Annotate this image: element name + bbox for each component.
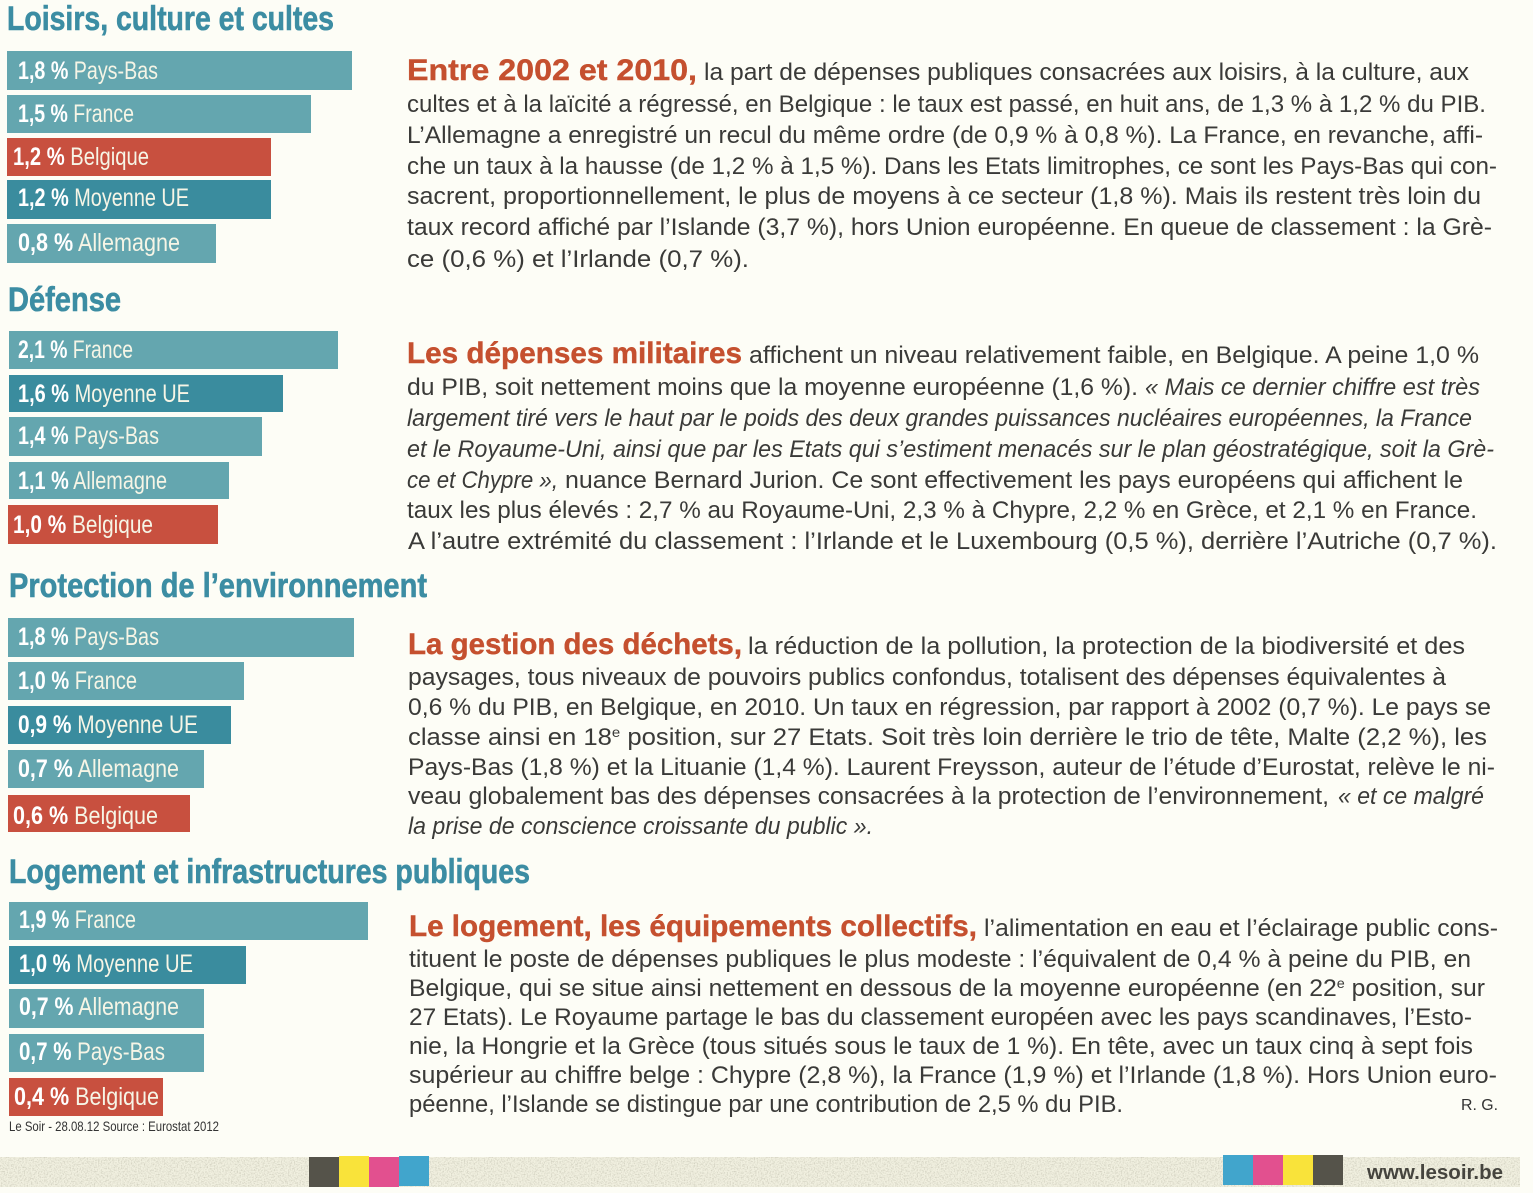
bar: Moyenne UE 0,9 % bbox=[8, 706, 231, 744]
text block: loisirs: taux record affiché par l’Islande (3,7 %), hors Union européenne. En queue de classement : la Grè- bbox=[407, 214, 1492, 241]
source credit: Le Soir - 28.08.12 Source : Eurostat 2012 bbox=[9, 1118, 219, 1134]
text block: défense: « Mais ce dernier chiffre est très bbox=[1145, 374, 1480, 401]
bar: Allemagne 0,7 %: 0,7 % Allemagne bbox=[18, 755, 179, 783]
bar: France 1,0 %: 1,0 % France bbox=[18, 667, 137, 695]
panel: protection de l'environnement chart bbox=[8, 567, 427, 832]
text block: défense: ce et Chypre », bbox=[407, 467, 558, 494]
bar: Allemagne 0,7 % bbox=[8, 750, 204, 788]
text block: environnement: paysages, tous niveaux de pouvoirs publics confondus, totalisent des dépenses équivalentes à bbox=[408, 664, 1447, 691]
bar: Pays-Bas 1,8 % bbox=[8, 618, 354, 657]
bar: Belgique 0,6 %: 0,6 % Belgique bbox=[13, 802, 158, 830]
text block: logement: péenne, l’Islande se distingue par une contribution de 2,5 % du PIB. bbox=[409, 1091, 1123, 1118]
text block: logement: nie, la Hongrie et la Grèce (tous situés sous le taux de 1 %). En tête, avec un taux cinq à sept fois bbox=[409, 1033, 1473, 1060]
bar: France 1,9 %: 1,9 % France bbox=[19, 906, 136, 934]
heading: défense: Défense bbox=[8, 281, 121, 319]
bar: Belgique 1,0 % bbox=[8, 505, 218, 544]
bar: Belgique 1,0 %: 1,0 % Belgique bbox=[13, 511, 153, 539]
lead-in: entre 2002 et 2010: Entre 2002 et 2010, bbox=[407, 54, 697, 87]
panel: défense chart bbox=[8, 281, 338, 544]
text block: logement: l’alimentation en eau et l’éclairage public cons- bbox=[984, 915, 1498, 942]
text block: défense: et le Royaume-Uni, ainsi que par les Etats qui s’estiment menacés sur le plan géostratégique, soit la Grè- bbox=[407, 436, 1494, 463]
bar: Allemagne 0,7 % bbox=[9, 989, 204, 1028]
text block: loisirs: cultes et à la laïcité a régressé, en Belgique : le taux est passé, en huit ans, de 1,3 % à 1,2 % du PIB. bbox=[407, 91, 1486, 118]
colour registration marks left bbox=[309, 1156, 429, 1187]
bar: Pays-Bas 0,7 % bbox=[9, 1034, 204, 1072]
footer strip bbox=[0, 1155, 1520, 1187]
bar: Moyenne UE 1,2 % bbox=[7, 180, 271, 219]
bar: Pays-Bas 1,4 %: 1,4 % Pays-Bas bbox=[18, 422, 159, 450]
text block: environnement: 0,6 % du PIB, en Belgique, en 2010. Un taux en régression, par rapport à 2002 (0,7 %). Le pays se bbox=[408, 694, 1491, 721]
text block: environnement: classe ainsi en 18 bbox=[408, 724, 599, 751]
panel: logement et infrastructures publiques chart bbox=[9, 853, 530, 1134]
bar: France 1,5 %: 1,5 % France bbox=[18, 100, 134, 128]
colour registration marks right bbox=[1223, 1155, 1343, 1185]
text block: défense: taux les plus élevés : 2,7 % au Royaume-Uni, 2,3 % à Chypre, 2,2 % en Grèce, et 2,1 % en France. bbox=[407, 497, 1477, 524]
author initials: R. G. bbox=[1461, 1097, 1498, 1114]
text block: logement: tituent le poste de dépenses publiques le plus modeste : l’équivalent de 0,4 % à peine du PIB, en bbox=[409, 946, 1471, 973]
bar: Belgique 0,6 % bbox=[8, 795, 190, 832]
bar: France 1,0 % bbox=[8, 662, 244, 700]
text block: logement: Belgique, qui se situe ainsi nettement en dessous de la moyenne européenne (en 22 bbox=[409, 975, 1310, 1002]
bar: France 1,9 % bbox=[9, 902, 368, 940]
bar: Allemagne 0,8 % bbox=[7, 224, 216, 263]
heading: environnement: Protection de l’environnement bbox=[9, 567, 427, 605]
text block: environnement: Pays-Bas (1,8 %) et la Lituanie (1,4 %). Laurent Freysson, auteur de l’étude d’Eurostat, relève le ni- bbox=[408, 754, 1495, 781]
bar: Moyenne UE 1,0 % bbox=[9, 946, 246, 984]
text block: défense: du PIB, soit nettement moins que la moyenne européenne (1,6 %). bbox=[407, 374, 1138, 401]
bar: Pays-Bas 0,7 %: 0,7 % Pays-Bas bbox=[19, 1038, 165, 1066]
text block: environnement: e bbox=[612, 724, 620, 740]
text block: loisirs: sacrent, proportionnellement, le plus de moyens à ce secteur (1,8 %). Mais ils restent très loin du bbox=[407, 183, 1481, 210]
bar: Allemagne 0,7 %: 0,7 % Allemagne bbox=[19, 993, 179, 1021]
bar: Pays-Bas 1,8 %: 1,8 % Pays-Bas bbox=[18, 57, 158, 85]
text block: défense: largement tiré vers le haut par le poids des deux grandes puissances nucléaires européennes, la France bbox=[407, 405, 1472, 432]
text block: environnement: « et ce malgré bbox=[1338, 783, 1484, 810]
text block: défense: A l’autre extrémité du classement : l’Irlande et le Luxembourg (0,5 %), derrière l’Autriche (0,7 %). bbox=[408, 528, 1497, 555]
lead-in: le logement, les équipements collectifs: Le logement, les équipements collectifs, bbox=[409, 910, 977, 943]
text block: défense: affichent un niveau relativement faible, en Belgique. A peine 1,0 % bbox=[749, 342, 1479, 369]
website address: www.lesoir.be bbox=[1366, 1162, 1503, 1184]
bar: Allemagne 1,1 % bbox=[9, 462, 229, 499]
bar: Allemagne 0,8 %: 0,8 % Allemagne bbox=[18, 229, 180, 257]
bar: Pays-Bas 1,8 % bbox=[7, 51, 352, 90]
bar: Moyenne UE 0,9 %: 0,9 % Moyenne UE bbox=[18, 711, 198, 739]
lead-in: les dépenses militaires: Les dépenses militaires bbox=[407, 337, 742, 370]
bar: Moyenne UE 1,0 %: 1,0 % Moyenne UE bbox=[19, 950, 193, 978]
text block: environnement: veau globalement bas des dépenses consacrées à la protection de l’environnement, bbox=[408, 783, 1329, 810]
bar: Pays-Bas 1,8 %: 1,8 % Pays-Bas bbox=[18, 623, 159, 651]
bar: Allemagne 1,1 %: 1,1 % Allemagne bbox=[18, 467, 167, 495]
text block: environnement bbox=[408, 628, 1495, 840]
heading: loisirs: Loisirs, culture et cultes bbox=[7, 0, 334, 38]
bar: Moyenne UE 1,2 %: 1,2 % Moyenne UE bbox=[18, 184, 189, 212]
bar: Moyenne UE 1,6 %: 1,6 % Moyenne UE bbox=[18, 380, 190, 408]
bar: France 2,1 %: 2,1 % France bbox=[18, 336, 133, 364]
bar: Belgique 0,4 % bbox=[9, 1078, 163, 1116]
lead-in: la gestion des déchets: La gestion des déchets, bbox=[408, 628, 742, 661]
text block: loisirs bbox=[407, 54, 1497, 273]
panel: loisirs, culture et cultes chart bbox=[7, 0, 352, 263]
bar: Belgique 0,4 %: 0,4 % Belgique bbox=[14, 1083, 159, 1111]
text block: environnement: la réduction de la pollution, la protection de la biodiversité et des bbox=[748, 633, 1465, 660]
heading: logement: Logement et infrastructures publiques bbox=[9, 853, 530, 891]
bar: Belgique 1,2 %: 1,2 % Belgique bbox=[13, 143, 149, 171]
text block: loisirs: ce (0,6 %) et l’Irlande (0,7 %). bbox=[407, 246, 749, 273]
text block: logement: supérieur au chiffre belge : Chypre (2,8 %), la France (1,9 %) et l’Irlande (1,8 %). Hors Union euro- bbox=[409, 1062, 1497, 1089]
text block: logement: e bbox=[1337, 975, 1345, 991]
text block: loisirs: la part de dépenses publiques consacrées aux loisirs, à la culture, aux bbox=[704, 59, 1469, 86]
bar: France 1,5 % bbox=[7, 95, 311, 133]
bar: Pays-Bas 1,4 % bbox=[9, 417, 262, 456]
text block: logement: 27 Etats). Le Royaume partage le bas du classement européen avec les pays scandinaves, l’Esto- bbox=[409, 1004, 1472, 1031]
bar: France 2,1 % bbox=[9, 331, 338, 369]
text block: loisirs: L’Allemagne a enregistré un recul du même ordre (de 0,9 % à 0,8 %). La France, en revanche, affi- bbox=[407, 122, 1483, 149]
bar: Belgique 1,2 % bbox=[7, 138, 271, 176]
text block: défense bbox=[407, 337, 1497, 555]
text block: environnement: la prise de conscience croissante du public ». bbox=[408, 813, 873, 840]
text block: logement bbox=[409, 910, 1498, 1118]
bar: Moyenne UE 1,6 % bbox=[9, 375, 283, 412]
text block: logement: position, sur bbox=[1345, 975, 1485, 1002]
text block: environnement: position, sur 27 Etats. Soit très loin derrière le trio de tête, Malte (2,2 %), les bbox=[620, 724, 1487, 751]
text block: défense: nuance Bernard Jurion. Ce sont effectivement les pays européens qui affichent le bbox=[565, 467, 1463, 494]
text block: loisirs: che un taux à la hausse (de 1,2 % à 1,5 %). Dans les Etats limitrophes, ce sont les Pays-Bas qui con- bbox=[407, 153, 1497, 180]
